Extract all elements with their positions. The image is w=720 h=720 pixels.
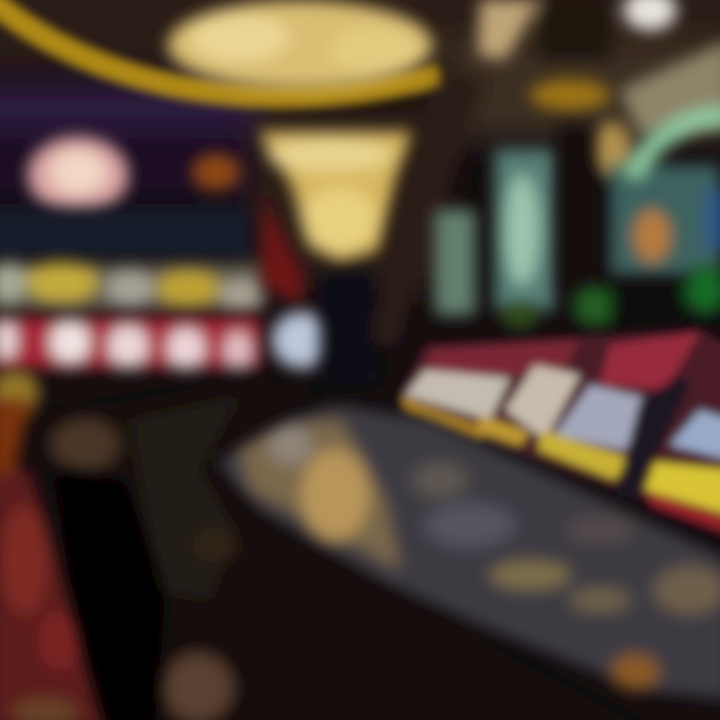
red banner: [262, 195, 305, 305]
slot row: red and white stripes: [0, 318, 260, 369]
hanging lamp: [258, 132, 412, 262]
orange glow: [192, 154, 240, 190]
left bottom: bar shapes: [0, 370, 640, 720]
green lights: [502, 266, 720, 328]
table top reflective surface: [215, 405, 720, 700]
slot row: upper signs: [0, 262, 265, 311]
dark figure: [55, 470, 165, 720]
slot machines row: [400, 330, 720, 535]
pink lamp: [28, 137, 128, 213]
dark central column: [320, 70, 485, 380]
ceiling: yellow arc: [0, 0, 440, 96]
ceiling lamp: main: [168, 1, 432, 89]
dark pillar right: [558, 125, 594, 300]
white-blue sign: [272, 312, 332, 368]
top right highlights: [478, 0, 720, 178]
carpet at lower left: [0, 400, 110, 720]
right wall: green and teal panels: [435, 116, 720, 315]
navy band: [0, 208, 252, 258]
ceiling: [0, 0, 720, 290]
